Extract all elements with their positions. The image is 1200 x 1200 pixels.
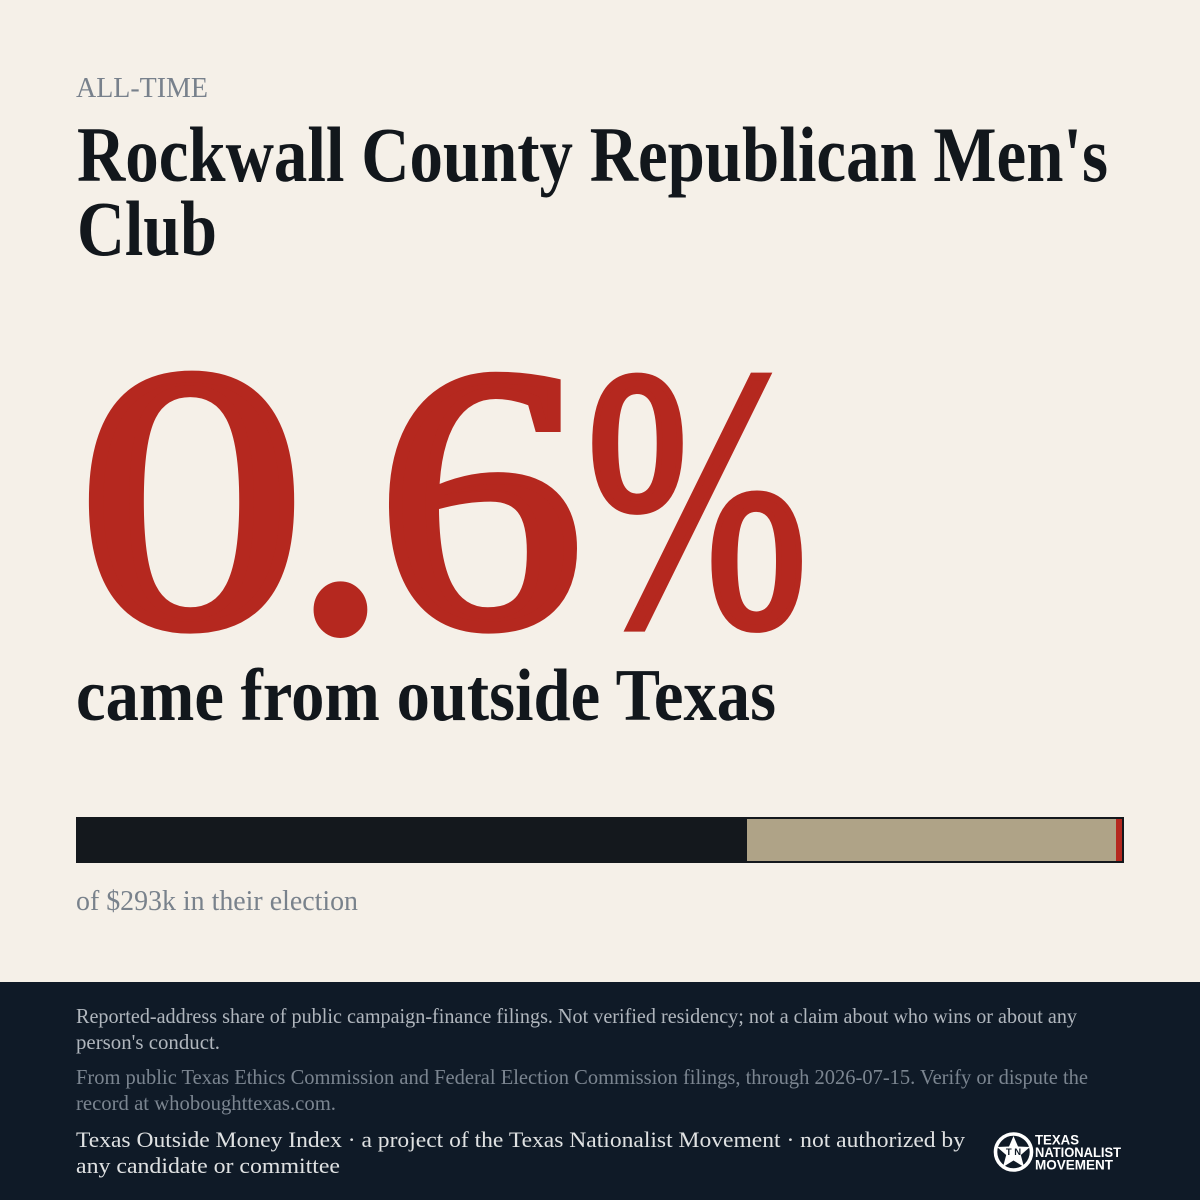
subheading: came from outside Texas [76, 655, 776, 737]
logo wordmark: TEXAS [1035, 1132, 1079, 1148]
logo: Texas Nationalist Movement [996, 1132, 1122, 1172]
big percentage: % [586, 294, 808, 706]
disclaimer text [76, 1004, 1077, 1054]
big percentage: . [299, 322, 382, 709]
bar caption: of $293k in their election [76, 886, 358, 917]
title: Club [77, 185, 217, 272]
logo wordmark: MOVEMENT [1035, 1158, 1114, 1172]
big percentage: 6 [378, 293, 583, 705]
disclaimer text: person's conduct. [76, 1030, 220, 1054]
big percentage: 0 [79, 293, 304, 705]
source text: record at whoboughttexas.com. [76, 1091, 336, 1115]
logo wordmark: NATIONALIST [1035, 1145, 1122, 1160]
disclaimer text: Reported-address share of public campaign-finance filings. Not verified residency; not a claim about who wins or about any [76, 1004, 1077, 1028]
logo wordmark [1035, 1132, 1122, 1172]
attribution text [76, 1127, 966, 1178]
title [77, 111, 1108, 272]
source text: From public Texas Ethics Commission and Federal Election Commission filings, through 2026-07-15. Verify or dispute the [76, 1065, 1088, 1089]
attribution text: Texas Outside Money Index · a project of the Texas Nationalist Movement · not authorized by [76, 1127, 966, 1152]
attribution text: any candidate or committee [76, 1153, 340, 1178]
footer panel [0, 982, 1200, 1200]
big percentage [79, 293, 808, 709]
eyebrow: time range: ALL-TIME [76, 73, 208, 104]
stacked bar chart [76, 817, 1124, 863]
source text [76, 1065, 1088, 1115]
icon: star in circle: T N [1006, 1147, 1021, 1158]
